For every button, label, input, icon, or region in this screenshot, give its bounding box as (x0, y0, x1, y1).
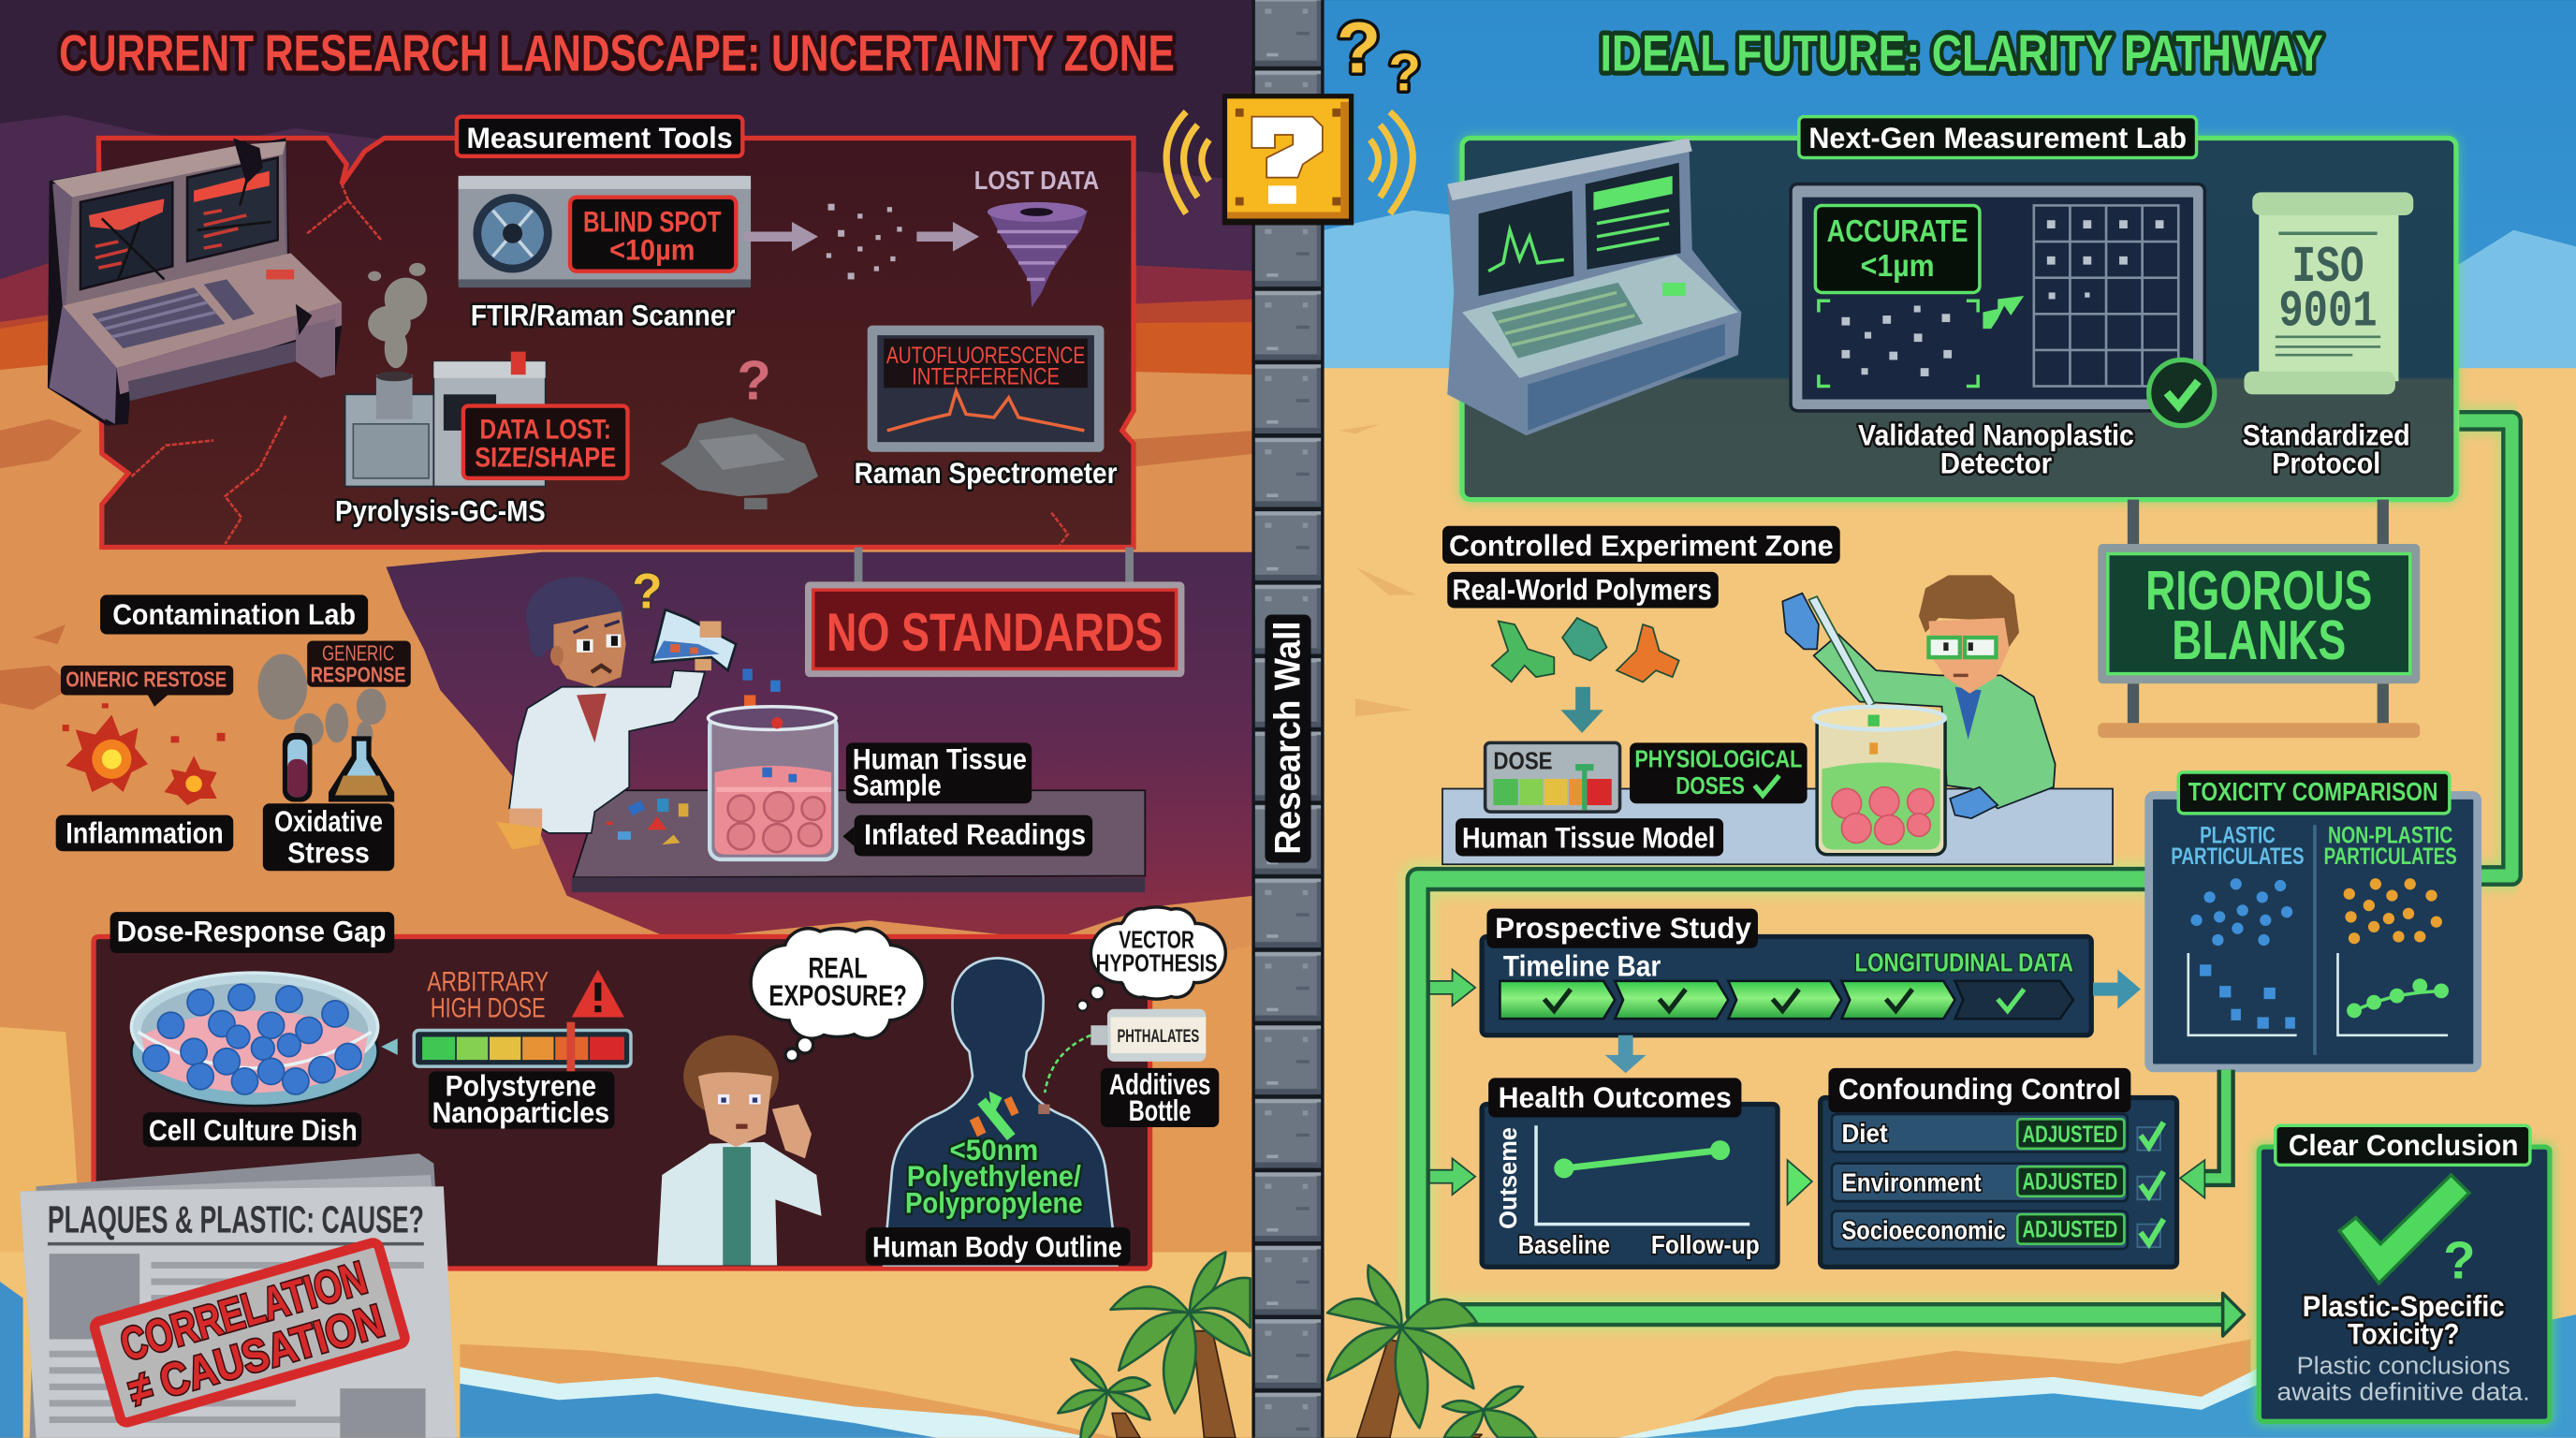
label: arbitrary high dose: HIGH DOSE (431, 992, 546, 1023)
icon: small question mark: ? (2443, 1231, 2476, 1290)
title: ideal future: IDEAL FUTURE: CLARITY PATHWAY (1600, 25, 2323, 82)
panel: health outcomes (1482, 1078, 1778, 1267)
panel cracks (131, 184, 1068, 548)
label: lost data: LOST DATA (974, 166, 1099, 195)
row: diet (1832, 1114, 2163, 1152)
particles in focus frame (1841, 306, 1952, 376)
label: follow-up: Follow-up (1651, 1230, 1760, 1259)
label: cell culture dish: Cell Culture Dish (149, 1113, 358, 1147)
callout: generic response: RESPONSE (311, 662, 406, 686)
icon: pyrolysis GC-MS instrument (345, 263, 546, 487)
icon: yellow question mark: ? (632, 564, 663, 619)
label: timeline bar: Timeline Bar (1503, 949, 1661, 983)
label: non-plastic particulates: PARTICULATES (2324, 844, 2457, 870)
callout: real exposure thought cloud: REAL (809, 950, 868, 984)
label: longitudinal data: LONGITUDINAL DATA (1855, 947, 2073, 976)
label: additives bottle: Additives (1109, 1067, 1211, 1101)
label: standardized protocol: Standardized (2243, 418, 2410, 452)
callout: data lost: DATA LOST: (479, 415, 611, 446)
callout: real exposure thought cloud: EXPOSURE? (768, 978, 907, 1012)
microplastic fragments (970, 1091, 1050, 1140)
callout: generic response (307, 641, 411, 687)
arrow: scanner to particles (744, 222, 818, 252)
callout: physiological doses: PHYSIOLOGICAL (1634, 745, 1802, 773)
icon: raman spectrometer screen: INTERFERENCE (912, 365, 1060, 390)
arrow: prospective study to toxicity (2093, 970, 2141, 1009)
scattered plastic pieces (607, 799, 688, 844)
panel: contamination lab (56, 594, 411, 871)
label: toxicity comparison (2178, 772, 2450, 814)
label: human tissue sample (846, 741, 1032, 803)
icon: raman spectrometer screen (868, 326, 1104, 452)
panel: dose-response gap (94, 905, 1227, 1269)
callout: physiological doses (1630, 742, 1808, 803)
panel: prospective study (1482, 909, 2091, 1035)
arrow: prospective study to health outcomes (1605, 1035, 1647, 1073)
label: plastic-specific toxicity: Plastic-Specific (2303, 1289, 2505, 1323)
label: conclusion note: Plastic conclusions (2297, 1351, 2510, 1379)
label: contamination lab: Contamination Lab (112, 597, 356, 631)
icon: human body outline (884, 958, 1117, 1265)
readout: accurate: <1µm (1861, 249, 1935, 284)
callout: data lost: SIZE/SHAPE (475, 443, 616, 474)
label: confounding control: Confounding Control (1838, 1072, 2121, 1106)
table (572, 790, 1145, 892)
dose gauge (1486, 742, 1620, 812)
icon: phthalates additives bottle (1045, 1009, 1206, 1093)
label: health outcomes: Health Outcomes (1499, 1080, 1732, 1114)
icon: sound waves left (1166, 111, 1209, 213)
label: plastic particulates (2171, 823, 2305, 870)
arrow: polymers to dose (1560, 687, 1603, 733)
icon: broken lab terminal (48, 138, 342, 426)
label: arbitrary high dose: ARBITRARY (427, 966, 549, 997)
icon: validated check badge (2149, 360, 2215, 426)
label: additives bottle (1101, 1067, 1219, 1127)
sign: rigorous blanks (2098, 500, 2420, 738)
icon: FTIR scanner (459, 176, 751, 287)
headline: PLAQUES & PLASTIC: CAUSE? (48, 1197, 424, 1240)
research wall (1251, 0, 1325, 1438)
label: plastic-specific toxicity: Toxicity? (2348, 1317, 2459, 1351)
check mark pending (1998, 990, 2024, 1010)
label: baseline: Baseline (1518, 1230, 1610, 1259)
label: polystyrene nanoparticles: Nanoparticles (432, 1095, 609, 1129)
icon: beaker with human tissue sample (708, 707, 836, 859)
label: polymer size: Polypropylene (905, 1185, 1083, 1219)
arrow: pipe to prospective study (1429, 970, 1475, 1005)
label: plastic particulates: PARTICULATES (2171, 844, 2305, 870)
sample grid (2034, 205, 2178, 387)
label: standardized protocol: Protocol (2272, 447, 2380, 480)
label: human tissue sample: Human Tissue (853, 741, 1027, 775)
label: plastic-specific toxicity (2303, 1289, 2505, 1351)
label: pyrolysis: Pyrolysis-GC-MS (335, 493, 546, 527)
dose gauge: DOSE (1493, 746, 1553, 774)
chart: non-plastic scatter (2338, 878, 2449, 1035)
scientist: confused researcher (496, 577, 705, 849)
readout: accurate: ACCURATE (1827, 214, 1969, 249)
label: human tissue sample: Sample (853, 769, 942, 802)
arrow: particles to lost data (916, 222, 979, 252)
stamp: correlation is not causation (93, 1241, 406, 1424)
label: non-plastic particulates: NON-PLASTIC (2328, 823, 2453, 848)
callout: oineric resiose: OINERIC RESTOSE (66, 668, 227, 692)
article lines (50, 1262, 424, 1423)
icon: phthalates additives bottle: PHTHALATES (1117, 1027, 1199, 1047)
callout: vector hypothesis thought cloud: HYPOTHESIS (1096, 948, 1218, 976)
label: FTIR scanner: FTIR/Raman Scanner (471, 299, 735, 332)
sign: rigorous blanks: RIGOROUS (2145, 559, 2372, 622)
callout: vector hypothesis thought cloud (1076, 905, 1227, 1012)
icon: palm trees left (1058, 1252, 1251, 1438)
row: environment (1832, 1164, 2163, 1201)
icon: residue blob with question (661, 349, 818, 509)
icon: palm trees right (1327, 1265, 1536, 1438)
label: oxidative stress: Stress (287, 835, 370, 869)
row: socioeconomic: Socioeconomic (1841, 1215, 2006, 1244)
arrow: green pathway pipe (1418, 420, 2512, 1336)
icon: question mark block (1222, 94, 1354, 226)
sign: rigorous blanks: BLANKS (2172, 609, 2346, 671)
stamp: correlation is not causation: CORRELATION (115, 1253, 373, 1372)
label: prospective study: Prospective Study (1495, 911, 1751, 945)
icon: oxidative stress tubes and smoke (258, 654, 394, 802)
label: y axis outcome: Outseme (1494, 1127, 1522, 1229)
label: conclusion note (2277, 1351, 2530, 1405)
label: raman spectrometer: Raman Spectrometer (855, 456, 1117, 490)
icon: residue blob with question: ? (737, 349, 771, 412)
panel: next-gen measurement lab (1447, 117, 2459, 503)
label: toxicity comparison: TOXICITY COMPARISON (2188, 777, 2438, 806)
sign: no standards (805, 548, 1184, 677)
title: current research landscape: CURRENT RESEARCH LANDSCAPE: UNCERTAINTY ZONE (59, 25, 1175, 82)
particles scatter (827, 204, 902, 279)
label: non-plastic particulates (2324, 823, 2457, 870)
icon: real-world polymer shapes (1492, 618, 1679, 682)
icon: ISO 9001 scroll (2244, 192, 2413, 394)
callout: real exposure thought cloud (749, 927, 927, 1064)
background: uncertainty zone landscape (0, 0, 1255, 1438)
icon: question marks: ? (1337, 7, 1381, 88)
scientist: thinking researcher (657, 1035, 822, 1265)
scientist: careful researcher with pipette (1782, 575, 2056, 818)
label: validated nanoplastic detector (1858, 418, 2134, 480)
callout: blind spot: <10µm (609, 232, 695, 266)
label: arbitrary high dose (427, 966, 549, 1023)
label: clear conclusion: Clear Conclusion (2289, 1128, 2519, 1162)
callout: vector hypothesis thought cloud: VECTOR (1119, 926, 1194, 954)
arrow: toxicity to confounding (2180, 1070, 2226, 1198)
label: polymer size (905, 1133, 1083, 1219)
table (1442, 789, 2113, 864)
label: validated nanoplastic detector: Detector (1940, 447, 2052, 480)
icon: sound waves right (1370, 111, 1412, 213)
research wall label: Research Wall (1267, 621, 1308, 855)
label: polymer size: <50nm (949, 1133, 1038, 1167)
icon: question marks: ? (1388, 43, 1421, 102)
label: polystyrene nanoparticles (429, 1069, 614, 1129)
image placeholder (50, 1254, 139, 1339)
icon: validated nanoplastic detector (1791, 184, 2215, 426)
background: clarity pathway landscape (1321, 0, 2576, 1438)
label: standardized protocol (2243, 418, 2410, 480)
label: oxidative stress (263, 803, 394, 871)
row: environment: Environment (1841, 1168, 1982, 1197)
chart: plastic scatter (2188, 878, 2297, 1035)
panel: clear conclusion (2254, 1125, 2554, 1426)
icon: big check mark (2339, 1175, 2469, 1284)
arrow: dish to dose bar (381, 1038, 398, 1055)
sign: no standards: NO STANDARDS (827, 603, 1164, 663)
icon: ISO 9001 scroll: 9001 (2278, 285, 2378, 342)
callout: blind spot (570, 198, 736, 271)
label: next-gen lab: Next-Gen Measurement Lab (1808, 121, 2187, 154)
icon: inflammation bursts (63, 703, 225, 805)
label: inflammation: Inflammation (66, 815, 224, 849)
arrow: sensor to grid (1983, 296, 2024, 329)
row: socioeconomic (1832, 1211, 2163, 1249)
label: dose-response gap: Dose-Response Gap (117, 915, 386, 948)
panel: measurement tools (48, 117, 1134, 548)
label: plastic particulates: PLASTIC (2200, 823, 2276, 848)
icon: tilted flask (652, 609, 781, 707)
icon: clean terminal (1447, 138, 1741, 435)
arrow: health outcomes to confounding (1788, 1160, 1812, 1205)
label: polymer size: Polyethylene/ (907, 1159, 1081, 1193)
icon: beaker with green sample (1814, 707, 1945, 855)
label: controlled experiment zone: Controlled Experiment Zone (1449, 528, 1834, 562)
chart: baseline to follow-up line (1536, 1125, 1749, 1225)
label: validated nanoplastic detector: Validated Nanoplastic (1858, 418, 2134, 452)
row: socioeconomic: ADJUSTED (2023, 1218, 2117, 1243)
callout: physiological doses: DOSES (1676, 771, 1745, 800)
label: inflated readings: Inflated Readings (864, 817, 1086, 851)
panel: controlled experiment zone (1442, 526, 2113, 864)
icon: raman spectrometer screen: AUTOFLUORESCENCE (886, 344, 1085, 369)
row: environment: ADJUSTED (2023, 1170, 2117, 1196)
label: real-world polymers: Real-World Polymers (1453, 573, 1712, 607)
question block with sound waves (1166, 7, 1421, 226)
label: additives bottle: Bottle (1129, 1093, 1191, 1127)
check marks (1544, 990, 1912, 1010)
icon: warning triangle (572, 970, 624, 1017)
callout: data lost (463, 406, 627, 478)
callout: oineric resiose (61, 666, 233, 707)
icon: question marks (1337, 7, 1421, 102)
arrow: pipe to health outcomes (1429, 1158, 1475, 1195)
icon: ISO 9001 scroll: ISO (2291, 240, 2364, 297)
label: measurement tools: Measurement Tools (466, 121, 733, 154)
label: conclusion note: awaits definitive data. (2277, 1377, 2530, 1405)
panel: confounding control (1821, 1068, 2177, 1267)
row: diet: ADJUSTED (2023, 1123, 2117, 1148)
icon: cell culture dish (131, 973, 378, 1106)
label: polystyrene nanoparticles: Polystyrene (446, 1069, 596, 1103)
panel: toxicity comparison (2149, 772, 2478, 1068)
stamp: correlation is not causation: ≠ CAUSATION (124, 1296, 389, 1416)
chart: timeline chevrons (1500, 981, 2073, 1019)
icon: data tornado (988, 202, 1088, 307)
callout: blind spot: BLIND SPOT (583, 205, 721, 239)
label: oxidative stress: Oxidative (274, 804, 383, 838)
callout: generic response: GENERIC (322, 641, 394, 666)
lab table with scientist and tissue sample (496, 564, 1145, 892)
label: human body outline: Human Body Outline (872, 1230, 1122, 1264)
row: diet: Diet (1841, 1119, 1888, 1148)
chart: high dose gauge (414, 1022, 631, 1075)
label: human tissue model: Human Tissue Model (1462, 821, 1715, 855)
readout: accurate (1815, 205, 1980, 292)
newspaper: plaques and plastic (20, 1153, 457, 1438)
